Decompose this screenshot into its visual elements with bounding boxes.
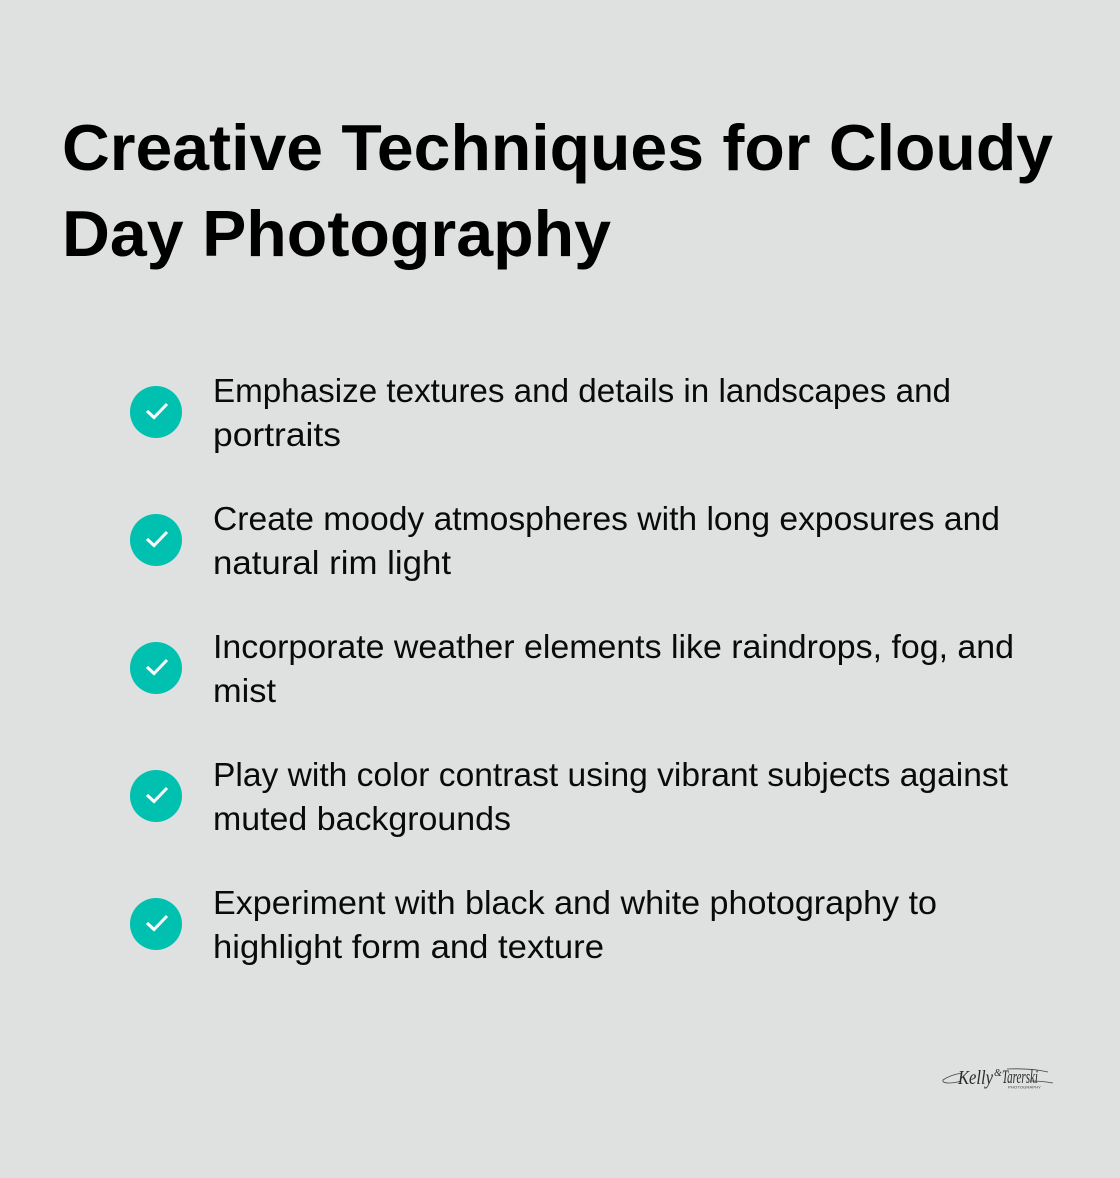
text: item 2 [213,500,1000,581]
title: Creative Techniques for Cloudy [62,111,1053,184]
icon: check 4 [130,770,182,822]
title [62,111,1053,270]
checklist [130,372,1014,965]
item 3 [130,628,1014,709]
icon: check 2 [130,514,182,566]
icon: check 5 [130,898,182,950]
text: item 1 [213,372,951,453]
text: item 2: natural rim light [213,544,451,581]
text: item 2: Create moody atmospheres with long exposures and [213,500,1000,537]
text: item 4 [213,756,1008,837]
item 4 [130,756,1008,837]
text: item 5: highlight form and texture [213,928,604,965]
text: item 4: Play with color contrast using vibrant subjects against [213,756,1008,793]
logo: signature: PHOTOGRAPHY [1008,1086,1042,1090]
text: item 3: mist [213,672,276,709]
text: item 5: Experiment with black and white photography to [213,884,937,921]
item 5 [130,884,937,965]
item 1 [130,372,951,453]
item 2 [130,500,1000,581]
logo: signature: Kelly [957,1067,993,1089]
title: Day Photography [62,197,611,270]
text: item 4: muted backgrounds [213,800,511,837]
text: item 3 [213,628,1014,709]
logo: signature: Tarerski [1002,1067,1038,1088]
logo: signature [943,1067,1053,1090]
icon: check 3 [130,642,182,694]
text: item 3: Incorporate weather elements like raindrops, fog, and [213,628,1014,665]
logo: signature: & [994,1068,1002,1079]
icon: check 1 [130,386,182,438]
text: item 5 [213,884,937,965]
text: item 1: portraits [213,416,341,453]
text: item 1: Emphasize textures and details in landscapes and [213,372,951,409]
